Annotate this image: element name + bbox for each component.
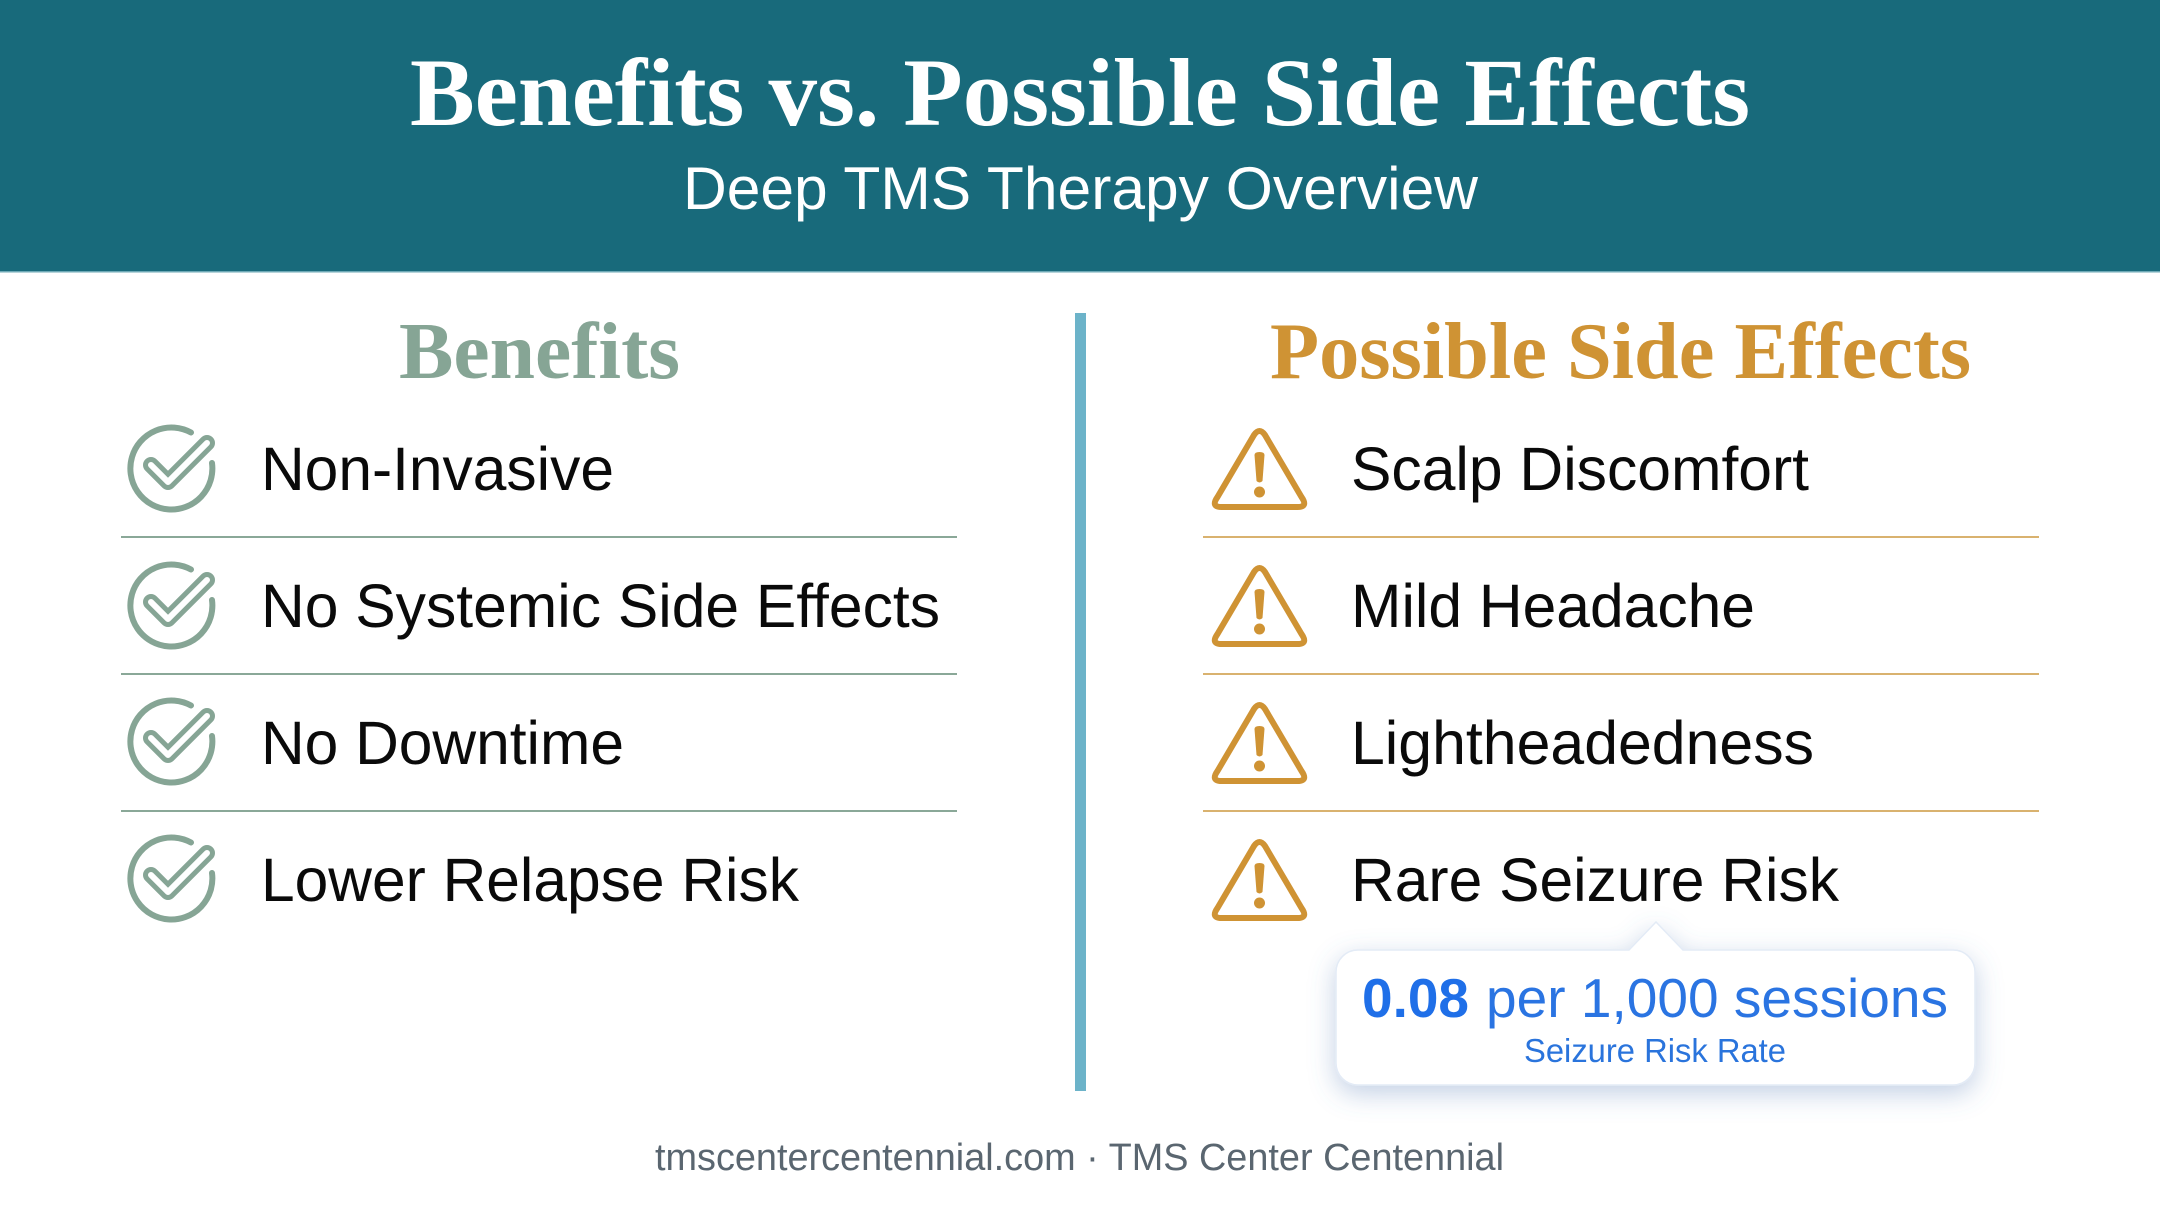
label: Scalp Discomfort bbox=[1351, 435, 1809, 503]
side effect row: Rare Seizure Risk bbox=[1215, 842, 1839, 918]
label: Mild Headache bbox=[1351, 572, 1755, 640]
side effect row: Lightheadedness bbox=[1215, 705, 1814, 781]
heading: possible side effects: Possible Side Effects bbox=[1270, 308, 1971, 396]
label: Non-Invasive bbox=[261, 435, 614, 503]
callout figure: per 1,000 sessions bbox=[1486, 967, 1948, 1029]
footer: tmscentercentennial.com · TMS Center Centennial bbox=[655, 1137, 1504, 1179]
side effect row: Mild Headache bbox=[1215, 568, 1755, 644]
icon: check circle bbox=[130, 700, 212, 782]
icon: warning triangle bbox=[1215, 568, 1304, 644]
icon: check circle bbox=[130, 837, 212, 919]
benefit row: No Downtime bbox=[130, 700, 624, 782]
benefit row: Lower Relapse Risk bbox=[130, 837, 799, 919]
callout caption: Seizure Risk Rate bbox=[1524, 1032, 1786, 1069]
subtitle: Deep TMS Therapy Overview bbox=[683, 155, 1479, 222]
label: Lightheadedness bbox=[1351, 709, 1814, 777]
label: No Downtime bbox=[261, 709, 624, 777]
icon: warning triangle bbox=[1215, 842, 1304, 918]
benefit row: Non-Invasive bbox=[130, 427, 614, 509]
center divider bbox=[1075, 313, 1086, 1091]
side effect row: Scalp Discomfort bbox=[1215, 431, 1809, 507]
label: Lower Relapse Risk bbox=[261, 846, 799, 914]
benefit row: No Systemic Side Effects bbox=[130, 564, 940, 646]
panel: possible side effects bbox=[1203, 308, 2039, 918]
icon: check circle bbox=[130, 564, 212, 646]
heading: benefits: Benefits bbox=[399, 308, 680, 396]
panel: benefits bbox=[121, 308, 957, 919]
header band bbox=[0, 0, 2160, 272]
callout figure: 0.08 bbox=[1362, 967, 1469, 1029]
icon: check circle bbox=[130, 427, 212, 509]
label: Rare Seizure Risk bbox=[1351, 846, 1839, 914]
callout: seizure risk rate bbox=[1336, 922, 1975, 1085]
icon: warning triangle bbox=[1215, 431, 1304, 507]
title: Benefits vs. Possible Side Effects bbox=[410, 39, 1750, 146]
icon: warning triangle bbox=[1215, 705, 1304, 781]
label: No Systemic Side Effects bbox=[261, 572, 940, 640]
